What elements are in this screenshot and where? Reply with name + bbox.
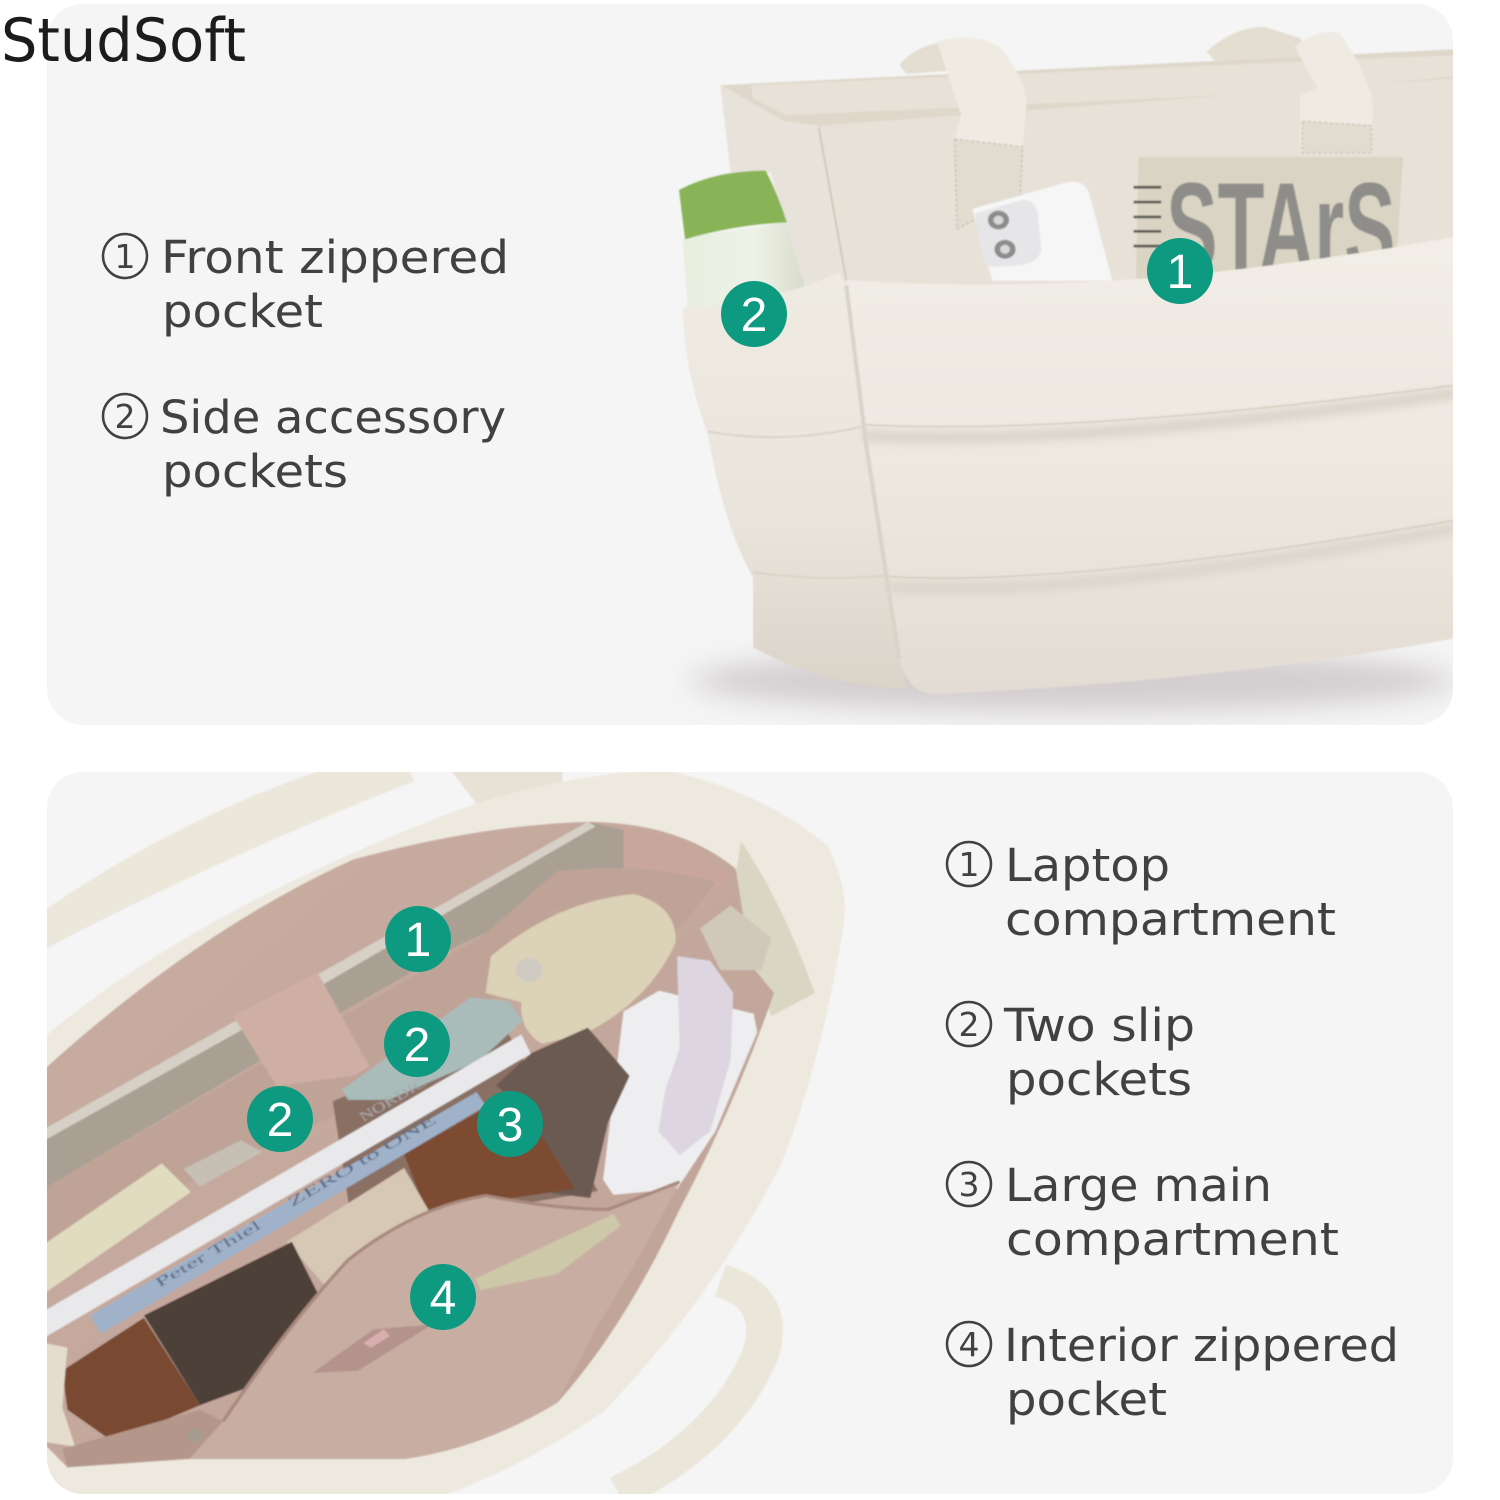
bottle (683, 222, 805, 310)
illustration: tote bag interior (44, 770, 845, 1495)
headphones (603, 991, 757, 1195)
heading: interior compartment list: compartment (1005, 893, 1336, 946)
heading: interior compartment list: pocket (1006, 1373, 1167, 1426)
marker 2 (721, 281, 787, 347)
heading: interior compartment list: Interior zippered (1004, 1319, 1399, 1372)
lining (44, 822, 774, 1467)
dark base under books (332, 1034, 598, 1203)
marker 1: 1 (1167, 246, 1193, 299)
marker 1: 1 (405, 914, 431, 967)
back wall (819, 78, 1456, 285)
heading: exterior pocket list: Front zippered (161, 231, 509, 284)
marker 2: 2 (741, 289, 767, 342)
watermark: StudSoft: StudSoft (1, 6, 246, 76)
heading: interior compartment list: 2 (958, 1005, 980, 1044)
marker 2: 2 (404, 1019, 430, 1072)
blanket (496, 1028, 630, 1198)
heading: interior compartment list: Two slip (1003, 999, 1195, 1052)
top opening (720, 49, 1456, 128)
top handles (44, 770, 414, 949)
left gusset (720, 85, 846, 290)
illustration: tote bag exterior (679, 27, 1456, 712)
heading: exterior pocket list (103, 231, 509, 498)
interior zip pocket (190, 1182, 680, 1459)
marker 2: 2 (267, 1094, 293, 1147)
front pocket (846, 237, 1456, 694)
heading: interior compartment list: compartment (1006, 1213, 1339, 1266)
marker 2 (384, 1011, 450, 1077)
back of handles (899, 43, 947, 74)
heading: exterior pocket list: pockets (162, 445, 348, 498)
marker 1 (385, 906, 451, 972)
marker 3 (477, 1091, 543, 1157)
power bank and notebook (184, 1140, 262, 1186)
side pocket (683, 273, 907, 689)
heading: exterior pocket list: 1 (114, 237, 136, 276)
notebook (1136, 157, 1403, 279)
quilting (864, 393, 1456, 438)
handle straps (937, 37, 1027, 148)
laptop (44, 822, 624, 1189)
marker 3: 3 (497, 1099, 523, 1152)
lower lining (62, 1410, 223, 1467)
heading: interior compartment list: Laptop (1005, 839, 1170, 892)
heading: interior compartment list: 3 (958, 1165, 980, 1204)
heading: interior compartment list (947, 839, 1399, 1426)
bag rim (44, 770, 845, 1495)
marker 4: 4 (430, 1272, 456, 1325)
books (90, 1092, 486, 1334)
zipper pull (700, 906, 771, 970)
phone (972, 182, 1112, 281)
illustration: tote bag interior: ZERO to ONE (285, 1112, 440, 1210)
heading: exterior pocket list: pocket (162, 285, 323, 338)
slip pocket items (342, 998, 523, 1100)
panel: exterior (47, 4, 1456, 725)
slip pocket lining (490, 868, 714, 930)
illustration: tote bag interior: NORDIC (356, 1075, 430, 1125)
heading: interior compartment list: 4 (958, 1325, 980, 1364)
marker 2 (247, 1086, 313, 1152)
panel: interior (44, 770, 1453, 1495)
marker 1 (1147, 238, 1213, 304)
heading: interior compartment list: 1 (958, 845, 980, 884)
marker 4 (410, 1264, 476, 1330)
heading: exterior pocket list: 2 (114, 397, 136, 436)
lower right handle (618, 1281, 765, 1493)
heading: exterior pocket list: Side accessory (160, 391, 506, 444)
heading: interior compartment list: Large main (1005, 1159, 1272, 1212)
illustration: tote bag interior: Peter Thiel (152, 1218, 264, 1291)
strap (233, 972, 369, 1086)
heading: interior compartment list: pockets (1006, 1053, 1192, 1106)
